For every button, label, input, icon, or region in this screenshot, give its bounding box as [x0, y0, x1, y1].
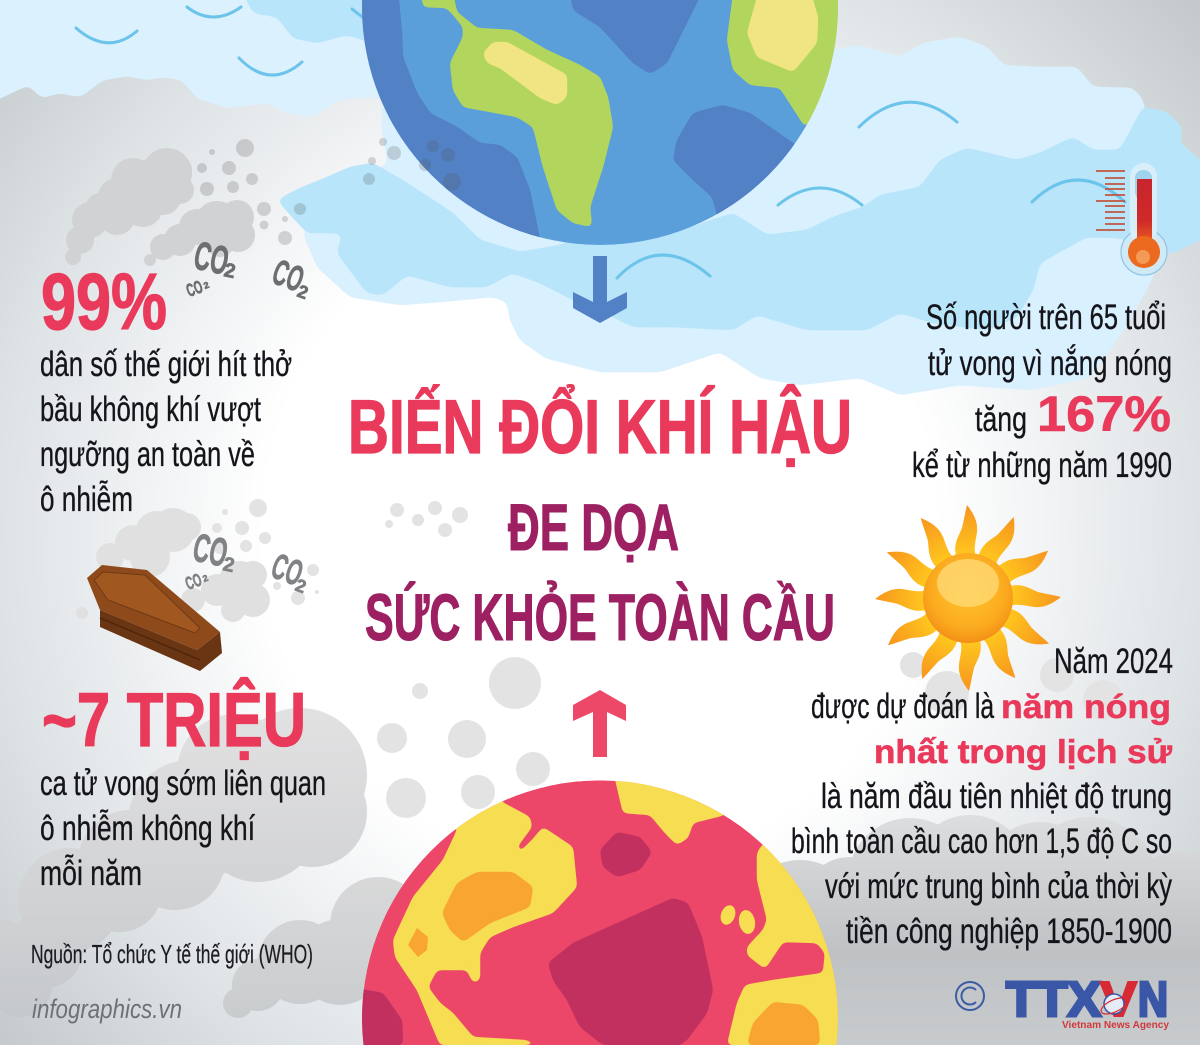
title: BIẾN ĐỔI KHÍ HẬU [348, 384, 852, 470]
hot spot: left dark [362, 989, 403, 1045]
text: year 2024 [791, 642, 1173, 951]
labels: CO2 upper: CO [190, 234, 233, 284]
icon: sun [875, 505, 1061, 691]
heat spots: twin yellow [720, 905, 756, 934]
text: year 2024: được dự đoán là [811, 687, 994, 726]
continent: africa [727, 0, 838, 125]
logo: TTXVN [956, 973, 1169, 1031]
hot spot: large dark [548, 898, 713, 1045]
stat: 7 million: ca tử vong sớm liên quan [40, 764, 326, 803]
stat: 99%: dân số thế giới hít thở [40, 345, 292, 384]
globe: blue earth [362, 0, 838, 245]
title: SỨC KHỎE TOÀN CẦU [365, 580, 835, 654]
labels: CO2 upper: 2 [295, 281, 311, 303]
stat: 7 million: ~7 TRIỆU [42, 677, 306, 763]
title: ĐE DỌA [508, 490, 679, 564]
arrow: down blue [573, 256, 627, 323]
stat: 7 million: ô nhiễm không khí [40, 809, 255, 848]
heat zone: left yellow [393, 785, 577, 1045]
smoke: upper lobes [65, 148, 255, 266]
stat: 167%: 167% [1037, 386, 1171, 442]
desert: south america [483, 42, 567, 105]
cloud: top left shade [237, 0, 420, 43]
labels: CO2 upper: 2 [202, 280, 210, 291]
globe: hot earth [362, 780, 838, 1045]
site credit: infographics.vn [32, 994, 182, 1024]
smoke cloud: bottom left small [223, 877, 426, 1018]
ocean: dark left [362, 0, 540, 238]
icon: coffin [87, 565, 222, 671]
stat: 99% [40, 257, 292, 519]
text: year 2024: năm nóng [1001, 688, 1171, 725]
labels: CO2 lower: CO [189, 526, 232, 576]
continent: south america [420, 0, 613, 227]
text: year 2024: nhất trong lịch sử [874, 733, 1172, 770]
labels: CO2 lower: CO [183, 569, 204, 594]
labels: CO2 upper: CO [184, 276, 205, 301]
cloud: top left [0, 0, 420, 117]
logo: TTXVN: V [1100, 973, 1137, 1027]
stat: 7 million: mỗi năm [40, 854, 142, 893]
labels: CO2 upper: 2 [222, 259, 237, 283]
stat: 167% [912, 298, 1172, 485]
labels: CO2 lower: 2 [201, 573, 209, 584]
heat zone: right yellow [728, 844, 838, 1045]
labels: CO2 lower [183, 526, 309, 597]
source note: Nguồn: Tổ chức Y tế thế giới (WHO) [31, 939, 313, 969]
smoke: lower lobes [76, 508, 270, 622]
smoke cloud: bottom right [740, 815, 1200, 1045]
arrow: up red [573, 690, 626, 757]
swooshes [76, 7, 1125, 278]
smoke particles: middle [212, 499, 1123, 818]
smoke cloud: bottom left large [0, 708, 367, 1017]
labels: CO2 lower: 2 [221, 553, 236, 577]
logo: TTXVN: TTX [1006, 973, 1101, 1027]
heat zone: top yellow [615, 780, 724, 844]
cloud: main pale [303, 0, 1160, 395]
title [348, 384, 852, 654]
smoke particles [197, 138, 461, 245]
stat: 7 million [40, 677, 326, 893]
labels: CO2 upper: CO [267, 251, 309, 300]
bottom smoke clouds [0, 708, 1200, 1045]
labels: CO2 lower: CO [266, 545, 308, 594]
heat zone: left orange [442, 872, 533, 942]
stat: 99%: ngưỡng an toàn về [40, 435, 255, 474]
cloud: main shade [277, 107, 1200, 330]
ocean: dark top [571, 0, 698, 73]
logo: TTXVN: Vietnam News Agency [1062, 1020, 1169, 1031]
ocean: dark right [674, 106, 794, 214]
desert: africa [747, 0, 818, 72]
heat zone: small orange [408, 928, 428, 957]
icon: thermometer [1096, 163, 1167, 275]
hot spot: small dark [600, 832, 652, 877]
labels: CO2 lower: 2 [293, 575, 309, 597]
sky clouds [0, 0, 1200, 395]
logo: TTXVN: N [1138, 973, 1168, 1027]
stat: 167%: tăng [975, 400, 1027, 439]
labels: CO2 upper [184, 234, 311, 303]
heat zone: right orange [747, 1002, 820, 1045]
stat: 99%: ô nhiễm [40, 480, 133, 519]
stat: 99%: bầu không khí vượt [40, 390, 261, 429]
stat: 99%: 99% [41, 257, 167, 346]
icon: copyright [956, 982, 984, 1010]
